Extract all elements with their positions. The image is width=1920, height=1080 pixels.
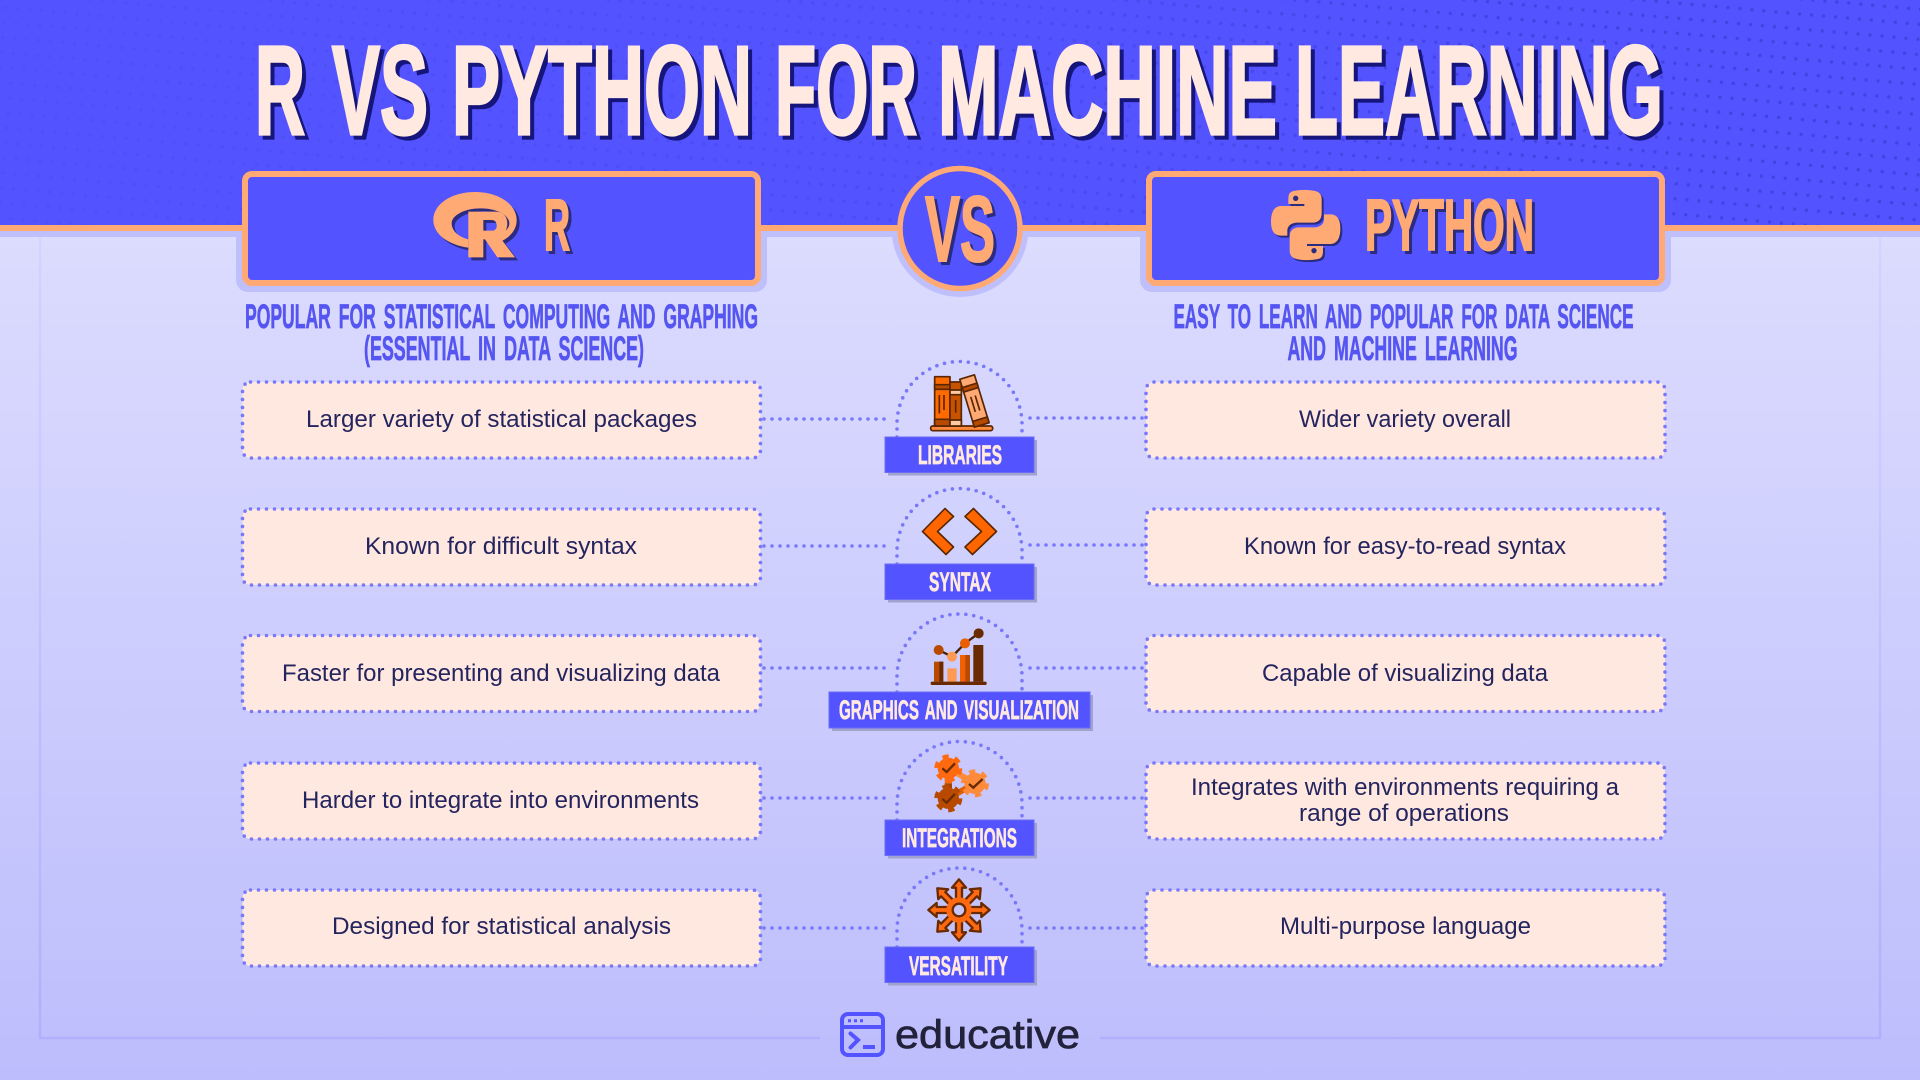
- logo: educative: [842, 1013, 1080, 1057]
- panel: R header: [245, 174, 758, 283]
- label: libraries: [885, 437, 1037, 476]
- R label: R: [544, 186, 570, 266]
- label: versatility: VERSATILITY: [909, 951, 1008, 981]
- card: Python libraries: [1146, 382, 1665, 458]
- panel: VS badge: [900, 168, 1020, 288]
- center: graphics and visualization: [829, 614, 1093, 731]
- Python description: AND MACHINE LEARNING: [1288, 330, 1518, 368]
- card: R integrations: Harder to integrate into environments: [302, 787, 699, 814]
- card: R versatility: Designed for statistical analysis: [332, 913, 671, 940]
- card: R libraries: [242, 382, 760, 458]
- label: syntax: [885, 564, 1037, 602]
- card: Python versatility: [1146, 890, 1665, 966]
- label: graphics and visualization: GRAPHICS AND VISUALIZATION: [839, 695, 1079, 725]
- label: integrations: [885, 820, 1037, 858]
- card: R libraries: Larger variety of statistical packages: [306, 406, 697, 433]
- Python description: [1174, 298, 1634, 368]
- card: R graphics: [242, 636, 760, 712]
- title: VS: [332, 20, 428, 161]
- icon: terminal window: [842, 1014, 883, 1055]
- title: PYTHON: [452, 20, 752, 161]
- connectors: [764, 418, 1144, 928]
- icon: books: [931, 375, 993, 431]
- title: [255, 20, 1663, 161]
- panel: Python header: [1149, 174, 1662, 283]
- Python label: PYTHON: [1365, 186, 1534, 266]
- card: R syntax: Known for difficult syntax: [365, 533, 637, 560]
- title: R: [255, 20, 305, 161]
- panel: Python cards: [1146, 382, 1665, 966]
- card: Python graphics: Capable of visualizing data: [1262, 660, 1548, 687]
- R description: POPULAR FOR STATISTICAL COMPUTING AND GRAPHING: [245, 298, 758, 336]
- label: versatility: [885, 947, 1037, 986]
- R description: [245, 298, 758, 368]
- card: Python graphics: [1146, 636, 1665, 712]
- icon: Python logo: [1271, 190, 1342, 262]
- R description: (ESSENTIAL IN DATA SCIENCE): [364, 330, 644, 368]
- wordmark: educative: [895, 1013, 1080, 1057]
- card: Python versatility: Multi-purpose language: [1280, 913, 1531, 940]
- card: R syntax: [242, 509, 760, 585]
- header band: [0, 0, 1920, 231]
- label: libraries: LIBRARIES: [918, 440, 1002, 470]
- card: Python integrations: [1146, 763, 1665, 839]
- panel: VS badge: VS: [925, 177, 995, 281]
- icon: chart: [931, 628, 987, 685]
- title: FOR: [775, 20, 917, 161]
- title: MACHINE: [938, 20, 1277, 161]
- icon: gears: [938, 758, 986, 809]
- card: R graphics: Faster for presenting and visualizing data: [282, 660, 720, 687]
- background frame: [40, 231, 1880, 1038]
- header halo: [0, 160, 1920, 297]
- card: Python integrations: Integrates with environments requiring a: [1191, 774, 1619, 801]
- card: Python syntax: Known for easy-to-read syntax: [1244, 533, 1566, 560]
- center: syntax: [885, 488, 1037, 602]
- icon: code brackets: [922, 508, 996, 554]
- card: Python integrations: range of operations: [1299, 800, 1509, 827]
- panel: R cards: [242, 382, 760, 966]
- icon: radiating arrows: [928, 879, 990, 941]
- card: Python syntax: [1146, 509, 1665, 585]
- center: integrations: [885, 742, 1037, 858]
- center: libraries: [885, 362, 1037, 476]
- card: R versatility: [242, 890, 760, 966]
- card: Python libraries: Wider variety overall: [1299, 406, 1511, 433]
- label: integrations: INTEGRATIONS: [902, 823, 1017, 853]
- label: graphics and visualization: [829, 692, 1093, 731]
- icon: R logo: [433, 192, 520, 260]
- label: syntax: SYNTAX: [929, 567, 991, 597]
- card: R integrations: [242, 763, 760, 839]
- center: versatility: [885, 868, 1037, 986]
